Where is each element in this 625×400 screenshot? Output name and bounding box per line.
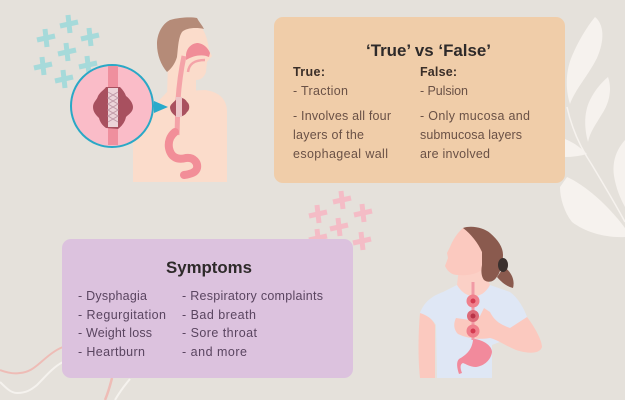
column: false: - Only mucosa and xyxy=(420,109,530,123)
column: true: True: xyxy=(293,65,325,79)
column: true xyxy=(293,65,391,161)
torso xyxy=(133,90,227,182)
left arm xyxy=(418,313,435,378)
neck xyxy=(457,268,490,296)
diverticulum xyxy=(170,98,189,117)
list left: - Heartburn xyxy=(78,345,145,359)
hair tie xyxy=(498,258,508,272)
column: true: layers of the xyxy=(293,128,364,142)
esophagus xyxy=(472,282,474,340)
column: false: are involved xyxy=(420,147,490,161)
list left: - Dysphagia xyxy=(78,289,147,303)
magnified esophagus circle xyxy=(71,65,153,147)
hair xyxy=(157,17,204,72)
face and neck xyxy=(167,26,212,98)
heading: Symptoms xyxy=(166,258,252,277)
column: false: submucosa layers xyxy=(420,128,522,142)
column: false: False: xyxy=(420,65,457,79)
list right xyxy=(182,289,323,359)
list left xyxy=(78,289,166,359)
list left: - Weight loss xyxy=(78,326,152,340)
column: true: - Involves all four xyxy=(293,109,391,123)
column: false xyxy=(420,65,530,161)
pain points xyxy=(466,294,480,338)
illustration: woman with heartburn xyxy=(418,227,542,378)
magnifier pointer xyxy=(154,101,168,113)
head xyxy=(445,228,484,275)
panel: true vs false xyxy=(274,17,565,183)
list left: - Regurgitation xyxy=(78,308,166,322)
column: false: - Pulsion xyxy=(420,84,468,98)
decorative leaf branch xyxy=(560,17,625,237)
teal plus signs xyxy=(34,15,99,88)
list right: - Respiratory complaints xyxy=(182,289,323,303)
decorative pink and white curves xyxy=(0,347,130,400)
stomach xyxy=(457,339,492,374)
esophagus xyxy=(177,56,184,135)
palate arcs xyxy=(188,60,205,72)
list right: - Sore throat xyxy=(182,326,258,340)
hand and forearm xyxy=(454,308,542,353)
list right: - Bad breath xyxy=(182,308,256,322)
stomach xyxy=(169,132,197,175)
column: true: esophageal wall xyxy=(293,147,388,161)
list right: - and more xyxy=(182,345,247,359)
pink plus signs xyxy=(309,191,372,250)
shirt xyxy=(420,285,527,378)
heading: ‘True’ vs ‘False’ xyxy=(366,41,491,60)
nasal cavity xyxy=(186,43,210,60)
illustration: man with esophagus xyxy=(133,17,227,182)
panel: symptoms xyxy=(62,239,353,378)
hair xyxy=(463,227,503,282)
ponytail xyxy=(497,267,514,288)
column: true: - Traction xyxy=(293,84,348,98)
